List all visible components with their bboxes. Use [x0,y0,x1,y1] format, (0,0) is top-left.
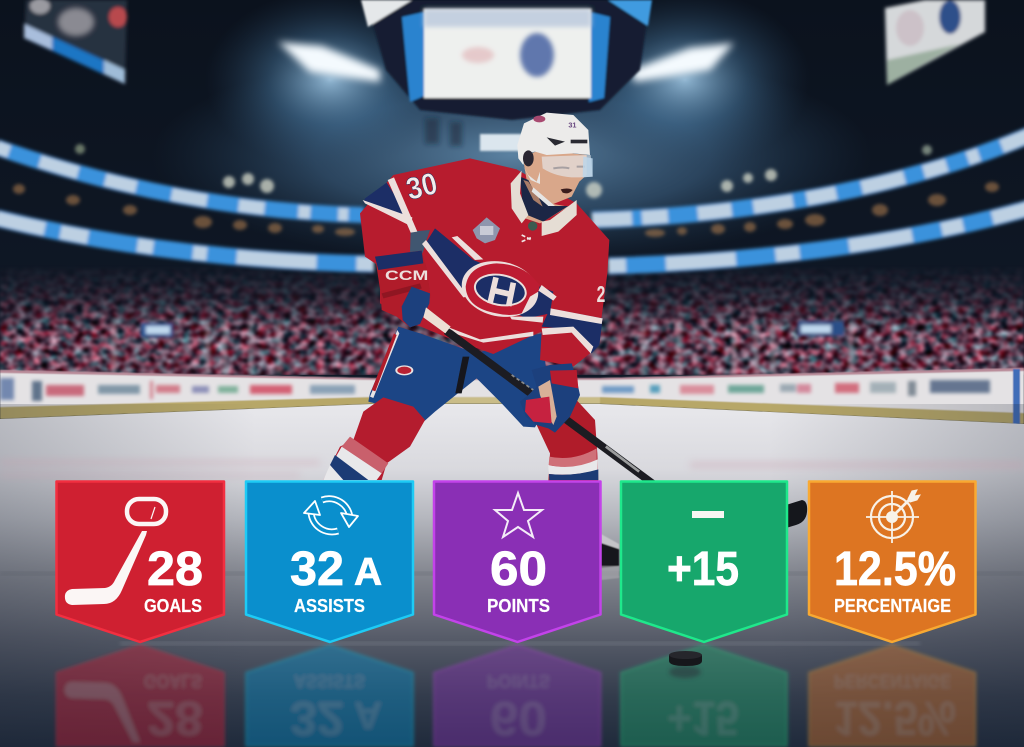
top left video screen [24,0,127,84]
right leg [537,398,598,482]
value: 60 [490,543,547,596]
label: POINTS [487,596,550,616]
stat card: plus minus [621,482,787,642]
team crest [456,254,544,324]
jersey body [360,158,609,367]
reflection: points [434,645,600,746]
sleeve bands [542,308,603,353]
icon: star [495,493,542,537]
shorts [368,327,550,427]
reflection: assists: 32 [290,691,344,744]
reflection: percentage [809,645,976,746]
chest stripe [422,228,557,343]
face and neck [520,150,593,223]
right glove [520,363,580,433]
stat card: goals [56,482,224,642]
icon: minus dash [692,511,724,518]
hockey player [323,113,670,497]
crowd band [0,265,1024,375]
value: 12.5% [834,543,956,596]
reflection: assists: ASSISTS [294,671,365,691]
stat card: assists [246,482,413,642]
reflection: points: POINTS [487,671,550,691]
left glove [375,251,431,327]
helmet [517,113,590,206]
small jersey patches [473,217,605,307]
skate behind cards [601,534,619,580]
reflection: plus minus: +15 [667,691,739,744]
icon: target with arrow [866,490,920,543]
reflection: assists: A [354,693,382,736]
stat card: shooting percentage [809,482,976,642]
label: GOALS [144,596,202,616]
ribbon boards [0,135,1024,266]
value: 32 [290,543,344,596]
reflection: percentage: PERCENTAIGE [834,671,951,691]
icon: circular arrows [304,499,358,532]
value: +15 [667,543,739,596]
reflection: plus minus [621,645,787,746]
stick shaft [423,307,670,497]
rink boards with sponsor panels [0,368,1024,424]
label: ASSISTS [294,596,365,616]
stat card: points [434,482,600,642]
shoulder yoke [363,177,417,233]
top right video screen [885,0,985,85]
label: PERCENTAIGE [834,596,951,616]
small blue signs [141,321,844,337]
ice surface [0,404,1024,747]
reflection: points: 60 [490,691,547,744]
left glove: CCM [385,267,428,283]
reflection: percentage: 12.5% [834,691,956,744]
reflection: goals [56,645,224,746]
white collar [511,171,577,236]
stick blade behind cards [786,500,807,528]
reflection: goals: GOALS [144,671,202,691]
reflection: assists [246,645,413,746]
centre hung scoreboard [361,0,652,151]
value: 28 [147,543,203,596]
number 30 on shoulder: 30 [403,166,441,207]
icon: hockey stick and loop [65,499,166,605]
value suffix: A [354,551,382,594]
arena overhead lights [278,42,734,82]
central arena light haze [152,45,872,265]
glass posts [111,318,854,375]
arena background [0,0,1024,376]
reflection: goals: 28 [147,691,203,744]
left leg [323,397,425,480]
stand lights [13,144,999,237]
card reflections on the ice [56,645,976,746]
small jersey patches: 2 [597,281,605,307]
hockey puck [669,651,702,678]
helmet: 31 [568,120,576,129]
